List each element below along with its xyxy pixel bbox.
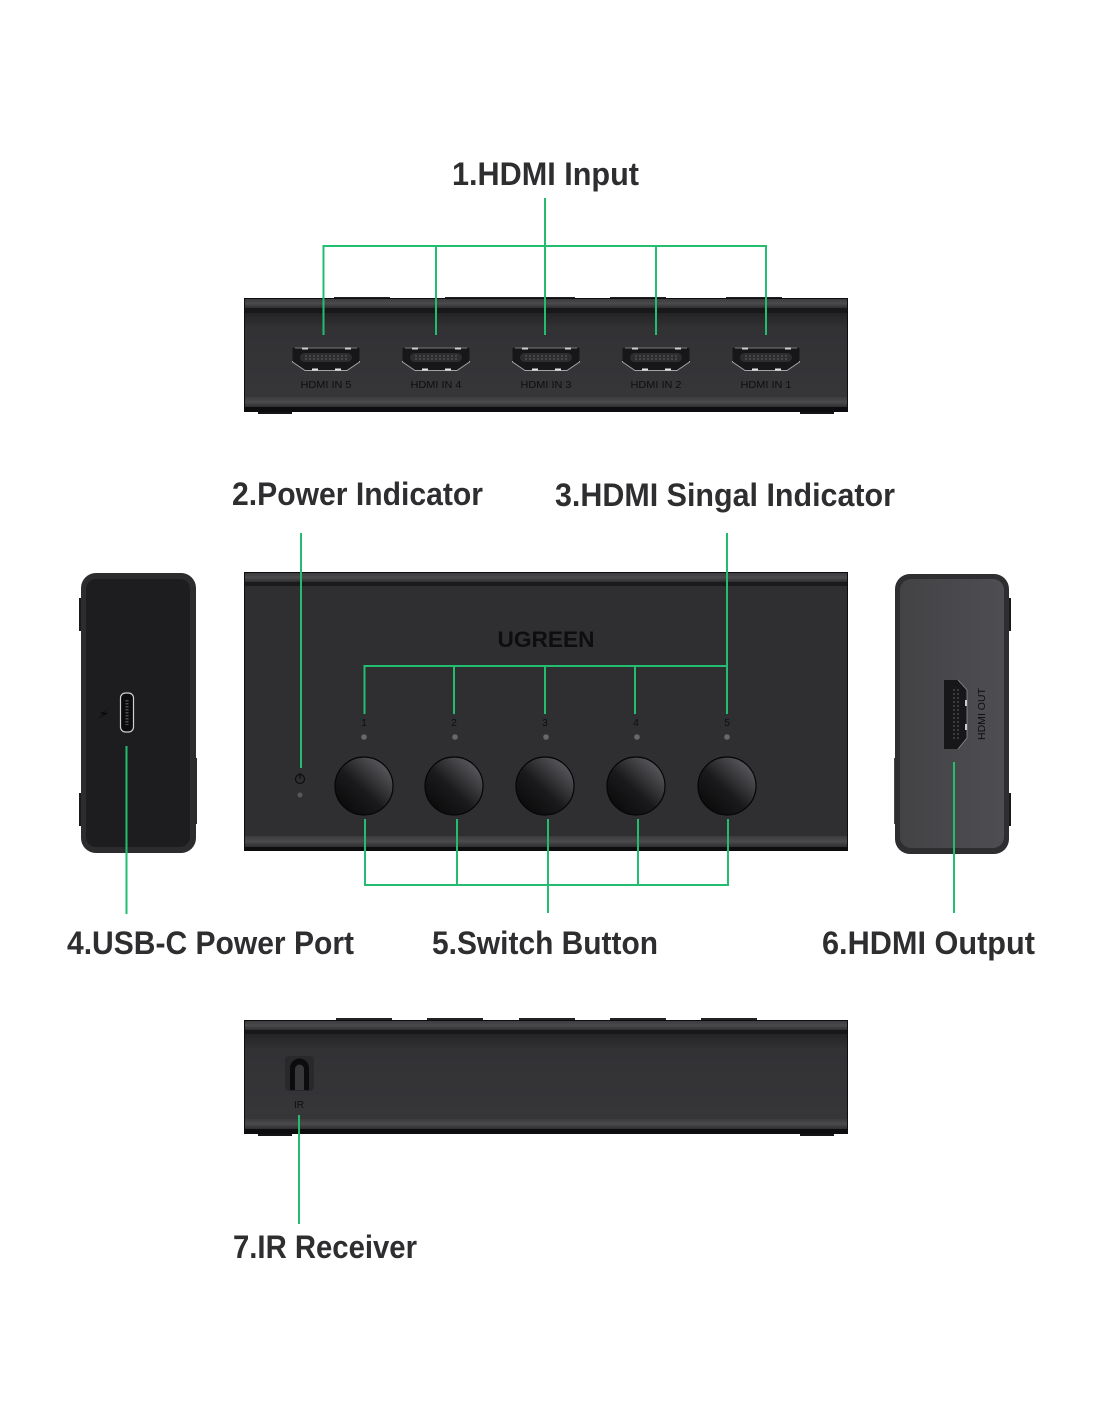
callout lines: HDMI input bbox=[324, 198, 766, 335]
channel numbers bbox=[361, 718, 730, 729]
heading: USB-C Power Port: 4.USB-C Power Port bbox=[67, 925, 354, 961]
icon: HDMI IN 2 port bbox=[622, 348, 690, 370]
icon: HDMI IN 5 port bbox=[292, 348, 360, 370]
signal indicator lights bbox=[361, 734, 730, 740]
channel numbers: 5 bbox=[724, 718, 730, 729]
switch buttons bbox=[335, 757, 756, 815]
port labels: HDMI IN 1 bbox=[740, 380, 792, 391]
port labels: HDMI IN 5 bbox=[300, 380, 352, 391]
channel numbers: 4 bbox=[633, 718, 639, 729]
port labels: HDMI IN 3 bbox=[520, 380, 572, 391]
icon: lightning bolt bbox=[97, 708, 110, 719]
channel numbers: 1 bbox=[361, 718, 367, 729]
label: IR: IR bbox=[294, 1100, 304, 1111]
heading: HDMI Singal Indicator: 3.HDMI Singal Indicator bbox=[555, 477, 895, 513]
callout lines: HDMI signal indicator bbox=[364, 533, 727, 714]
port labels: HDMI IN 2 bbox=[630, 380, 682, 391]
heading: Power Indicator: 2.Power Indicator bbox=[232, 476, 483, 512]
icon: HDMI output port bbox=[944, 680, 967, 749]
callout line: HDMI output bbox=[953, 762, 955, 913]
logo: UGREEN: UGREEN bbox=[498, 627, 594, 652]
callout line: power indicator bbox=[300, 533, 302, 768]
port labels bbox=[300, 380, 792, 391]
icon: USB-C port bbox=[120, 693, 134, 732]
callout line: USB-C power port bbox=[126, 746, 128, 914]
channel numbers: 2 bbox=[451, 718, 457, 729]
channel numbers: 3 bbox=[542, 718, 548, 729]
heading: HDMI Input: 1.HDMI Input bbox=[452, 156, 639, 192]
label: HDMI OUT: HDMI OUT bbox=[977, 688, 988, 740]
heading: IR Receiver: 7.IR Receiver bbox=[233, 1229, 417, 1265]
heading: HDMI Output: 6.HDMI Output bbox=[822, 925, 1035, 961]
port labels: HDMI IN 4 bbox=[410, 380, 462, 391]
icon: power symbol and light bbox=[296, 773, 304, 798]
icon: IR receiver window bbox=[285, 1056, 314, 1091]
panel: back view with IR receiver bbox=[244, 1018, 848, 1136]
icon: HDMI IN 1 port bbox=[732, 348, 800, 370]
panel: left side with USB-C port bbox=[79, 573, 197, 853]
heading: Switch Button: 5.Switch Button bbox=[432, 925, 658, 961]
callout lines: switch button bbox=[365, 819, 728, 913]
icon: HDMI IN 3 port bbox=[512, 348, 580, 370]
panel: top view of switch with HDMI inputs bbox=[244, 297, 848, 414]
icon: HDMI IN 4 port bbox=[402, 348, 470, 370]
panel: front view of switch bbox=[244, 572, 848, 851]
callout line: IR receiver bbox=[298, 1115, 300, 1224]
panel: right side with HDMI output bbox=[894, 574, 1011, 854]
